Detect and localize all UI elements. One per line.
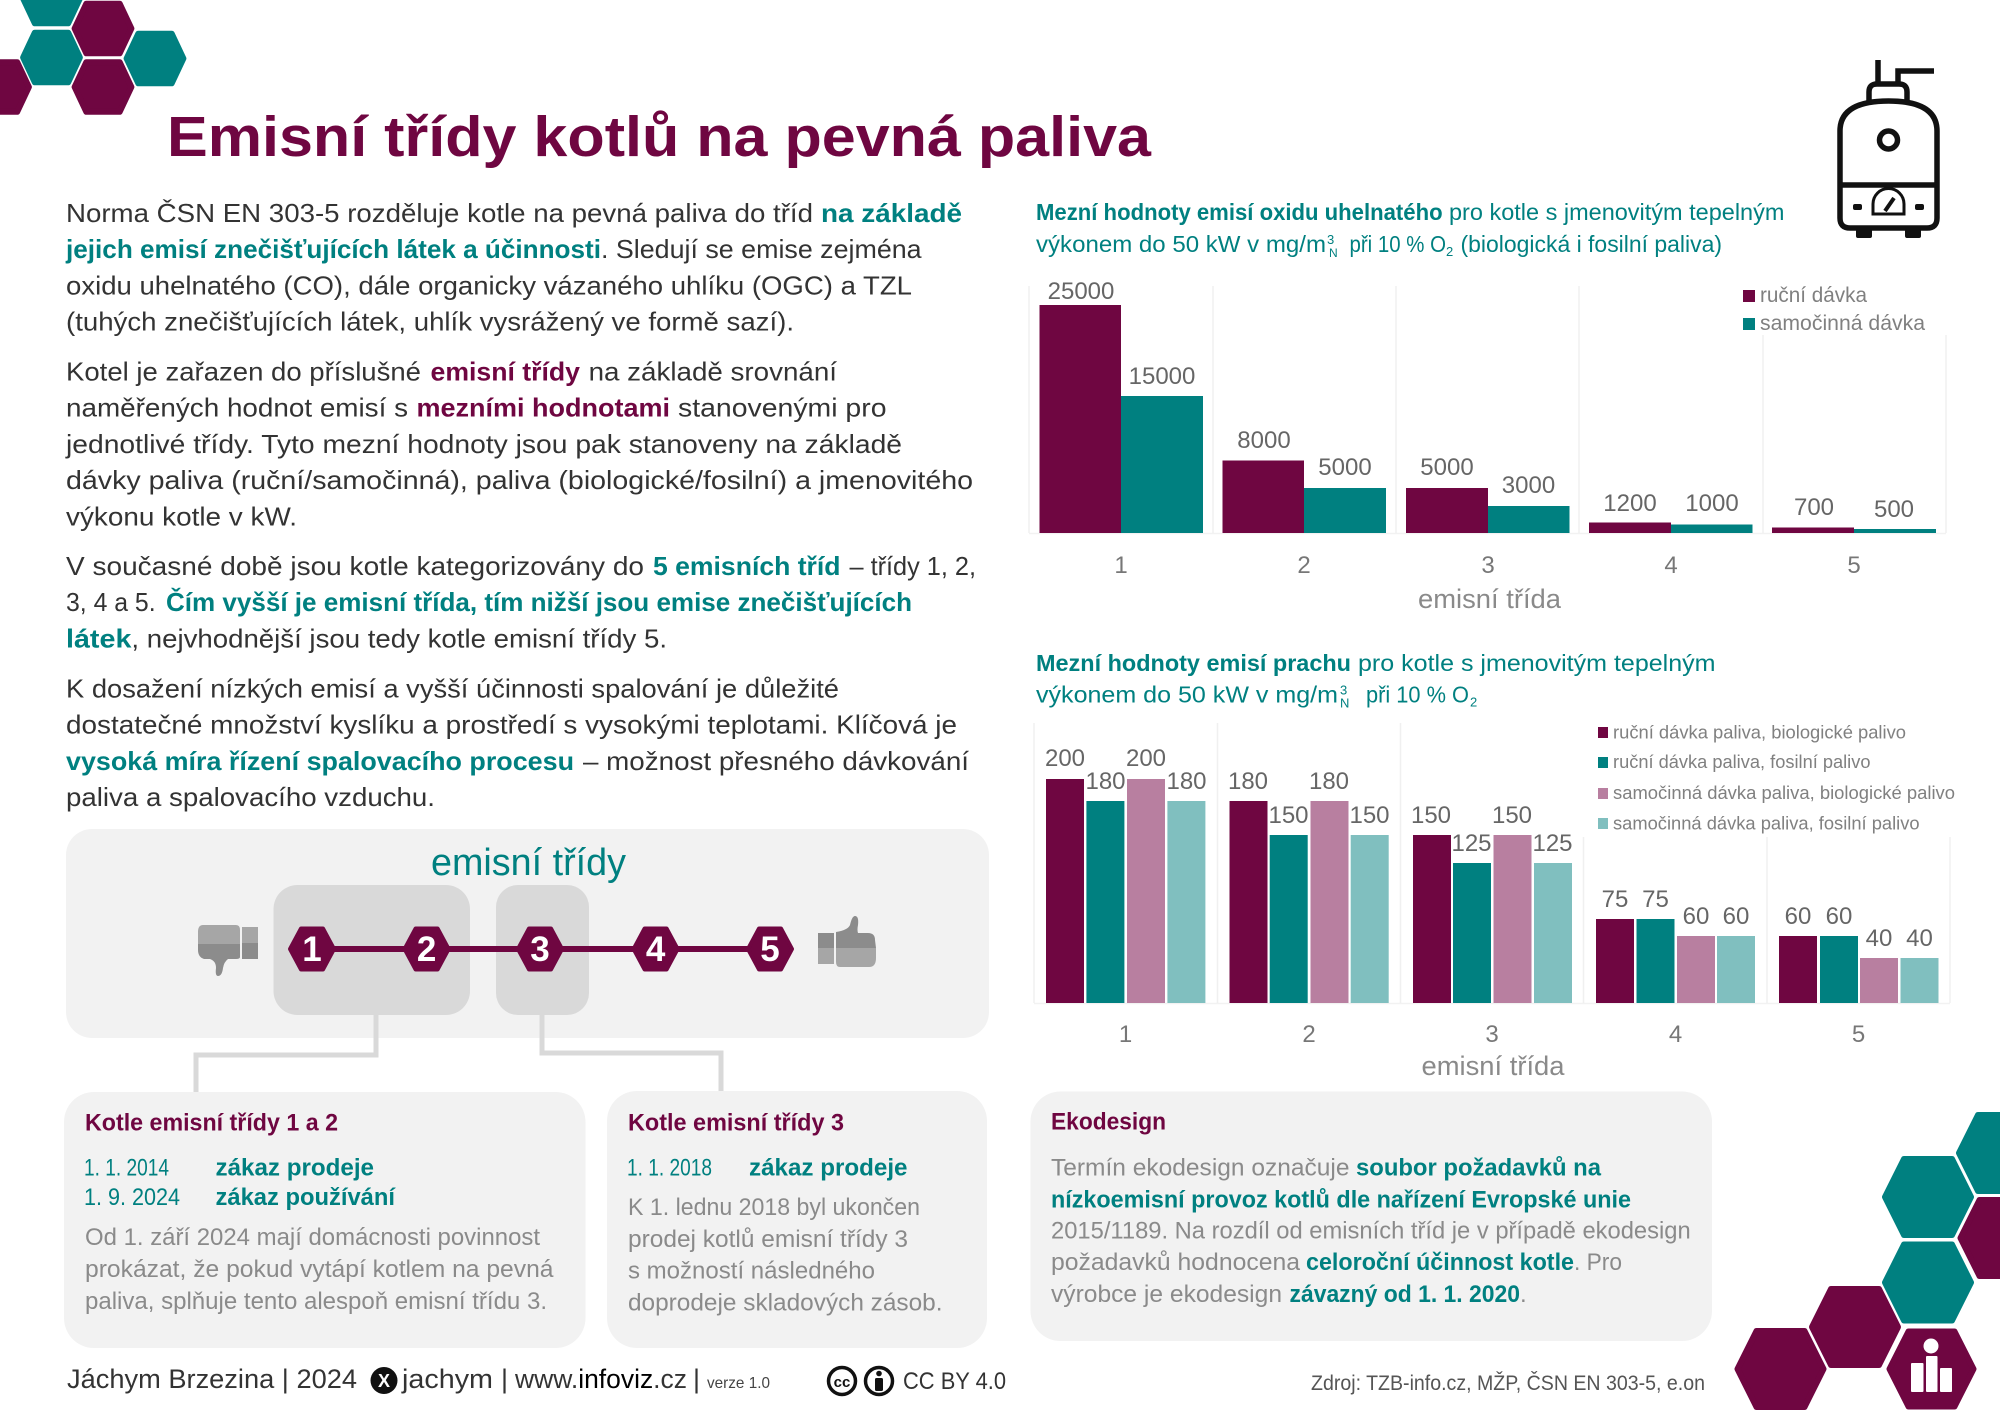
text block: intro paragraph 2 xyxy=(65,356,973,531)
text block: intro paragraph 4: – možnost přesného dávkování xyxy=(583,746,970,776)
card text: prokázat, že pokud vytápí kotlem na pevná xyxy=(85,1256,554,1283)
legend: ruční dávka paliva, fosilní palivo xyxy=(1613,752,1870,772)
ban date xyxy=(627,1154,908,1182)
text block: intro paragraph 3: 5 emisních tříd xyxy=(653,551,840,581)
heading: emisní třídy: emisní třídy xyxy=(431,842,626,884)
text block: intro paragraph 3 xyxy=(66,551,976,653)
text block: intro paragraph 3: látek xyxy=(66,623,132,653)
text block: intro paragraph 4: K dosažení nízkých emisí a vyšší účinnosti spalování je důležité xyxy=(66,674,839,704)
class 3 bars: 3000 xyxy=(1502,472,1555,499)
card text: paliva, splňuje tento alespoň emisní třídu 3. xyxy=(85,1288,547,1315)
text block: intro paragraph 4: dostatečné množství kyslíku a prostředí s vysokými teplotami. Klíčová je xyxy=(66,710,957,740)
ban dates: zákaz používání xyxy=(216,1184,396,1211)
footer: sources: Zdroj: TZB-info.cz, MŽP, ČSN EN 303-5, e.on xyxy=(1311,1372,1705,1395)
ban dates: 1. 9. 2024 xyxy=(84,1184,180,1211)
heading: dust chart: při 10 % O xyxy=(1366,682,1469,708)
text block: intro paragraph 3: , nejvhodnější jsou tedy kotle emisní třídy 5. xyxy=(131,623,667,653)
class 5 hexagon: 5 xyxy=(760,930,780,969)
icon: X logo: X xyxy=(378,1371,390,1391)
class 5 bars: 40 xyxy=(1866,925,1892,952)
heading: carbon monoxide chart: 3 xyxy=(1327,232,1334,247)
class 5 bars: 40 xyxy=(1906,925,1933,952)
text block: intro paragraph 1: . Sledují se emise zejména xyxy=(601,234,922,264)
class 5 bars: 500 xyxy=(1874,496,1914,523)
class 5 bars xyxy=(1772,494,1936,533)
text block: intro paragraph 2: Kotel je zařazen do příslušné xyxy=(66,356,421,386)
class 2 bars: 150 xyxy=(1268,802,1309,829)
class 3 bars: 125 xyxy=(1532,830,1573,857)
class 2 bars: 180 xyxy=(1228,768,1268,795)
panel: emission classes scale xyxy=(66,829,989,1038)
x axis labels: 4 xyxy=(1664,552,1678,579)
x axis title: emisní třída xyxy=(1418,584,1562,614)
panel text: soubor požadavků na xyxy=(1356,1154,1602,1182)
class 2 bars: 8000 xyxy=(1237,427,1291,454)
x axis labels: 5 xyxy=(1847,552,1861,579)
panel text: výrobce je ekodesign xyxy=(1051,1281,1282,1308)
class 5 bars xyxy=(1779,903,1938,1003)
heading: dust chart: Mezní hodnoty emisí prachu xyxy=(1036,650,1351,676)
class 4 bars: 60 xyxy=(1683,903,1709,930)
text block: intro paragraph 4 xyxy=(66,674,970,812)
heading: dust chart xyxy=(1036,650,1716,710)
text block: intro paragraph 3: Čím vyšší je emisní třída, tím nižší jsou emise znečišťujících xyxy=(166,587,912,617)
text block: intro paragraph 2: na základě srovnání xyxy=(589,356,838,386)
class 5 bars: 700 xyxy=(1794,494,1834,521)
icon: thumb down xyxy=(198,925,258,976)
x axis labels: 4 xyxy=(1669,1021,1682,1048)
x axis labels: 3 xyxy=(1481,552,1495,579)
class 1 bars: 15000 xyxy=(1129,363,1195,390)
text block: intro paragraph 2: jednotlivé třídy. Tyto mezní hodnoty jsou pak stanoveny na základě xyxy=(65,429,902,459)
panel text xyxy=(1051,1154,1691,1308)
heading: carbon monoxide chart: výkonem do 50 kW v mg/m xyxy=(1036,231,1326,257)
class 4 bars: 75 xyxy=(1642,886,1669,913)
text block: intro paragraph 1: (tuhých znečišťujících látek, uhlík vysrážený ve formě sazí). xyxy=(66,307,794,337)
legend xyxy=(1598,722,1955,834)
class 5 bars: 60 xyxy=(1785,903,1811,930)
text block: intro paragraph 1: jejich emisí znečišťujících látek a účinnosti xyxy=(65,234,601,264)
panel: boilers of classes 1 and 2 xyxy=(64,1092,586,1348)
class 3 hexagon xyxy=(518,928,562,970)
ban dates: 1. 1. 2014 xyxy=(84,1154,169,1182)
class 2 bars: 5000 xyxy=(1318,454,1372,481)
panel text: závazný od 1. 1. 2020 xyxy=(1290,1281,1520,1308)
icon: boiler xyxy=(1840,60,1937,238)
panel text: celoroční účinnost kotle xyxy=(1306,1249,1574,1276)
heading: carbon monoxide chart: při 10 % O xyxy=(1350,231,1446,257)
class 4 hexagon xyxy=(634,928,678,970)
class 5 bars: 60 xyxy=(1826,903,1852,930)
text block: intro paragraph 3: V současné době jsou kotle kategorizovány do xyxy=(66,551,644,581)
class 4 bars xyxy=(1596,886,1755,1003)
ban dates xyxy=(84,1154,396,1211)
text block: intro paragraph 4: vysoká míra řízení spalovacího procesu xyxy=(66,746,574,776)
class 4 bars: 1200 xyxy=(1603,490,1657,517)
panel text: 2015/1189. Na rozdíl od emisních tříd je v případě ekodesign xyxy=(1051,1218,1691,1244)
class 4 bars: 60 xyxy=(1723,903,1749,930)
heading: dust chart: pro kotle s jmenovitým tepelným xyxy=(1358,650,1716,676)
class 1 hexagon: 1 xyxy=(302,930,322,969)
icon: Creative Commons: cc xyxy=(834,1374,850,1391)
connector: class 3 to card xyxy=(542,1015,721,1092)
class 4 bars: 75 xyxy=(1602,886,1628,913)
heading: carbon monoxide chart: Mezní hodnoty emisí oxidu uhelnatého xyxy=(1036,199,1443,225)
class 2 bars: 180 xyxy=(1309,768,1349,795)
legend: samočinná dávka xyxy=(1760,312,1925,335)
heading: carbon monoxide chart: 2 xyxy=(1446,244,1453,259)
icon: Creative Commons xyxy=(828,1368,892,1394)
ban date: zákaz prodeje xyxy=(749,1154,908,1182)
x axis labels: 1 xyxy=(1114,552,1128,579)
panel text: Termín ekodesign označuje xyxy=(1051,1154,1350,1182)
class 4 bars: 1000 xyxy=(1685,490,1739,517)
x axis title: emisní třída xyxy=(1422,1051,1565,1081)
card text: K 1. lednu 2018 byl ukončen xyxy=(628,1194,920,1221)
text block: intro paragraph 2: mezními hodnotami xyxy=(416,393,670,423)
text block: intro paragraph 2: výkonu kotle v kW. xyxy=(66,501,297,531)
decoration: bottom-right hexagon cluster xyxy=(1738,1115,2000,1407)
x axis labels: 3 xyxy=(1485,1021,1499,1048)
text block: intro paragraph 3: 3, 4 a 5. xyxy=(66,587,156,617)
panel heading: Ekodesign xyxy=(1051,1108,1166,1136)
x axis labels: 2 xyxy=(1302,1021,1316,1048)
class 2 bars xyxy=(1228,768,1390,1003)
x axis labels xyxy=(1114,552,1861,579)
decoration: top-left hexagon cluster xyxy=(0,0,183,112)
heading: carbon monoxide chart: pro kotle s jmenovitým tepelným xyxy=(1449,199,1784,225)
text block: intro paragraph 2: stanovenými pro xyxy=(678,393,886,423)
card text: doprodeje skladových zásob. xyxy=(628,1290,942,1316)
heading: dust chart: 2 xyxy=(1470,694,1477,710)
text block: intro paragraph 1: na základě xyxy=(821,198,962,228)
icon: thumb up xyxy=(818,916,876,967)
class 1 bars: 200 xyxy=(1126,745,1166,772)
ban dates: zákaz prodeje xyxy=(216,1154,374,1182)
bar chart: dust limits xyxy=(1034,722,1955,1081)
text block: intro paragraph 1 xyxy=(65,198,962,337)
legend: ruční dávka paliva, biologické palivo xyxy=(1613,722,1906,742)
highlight box: class 3 xyxy=(496,885,589,1015)
legend xyxy=(1743,284,1925,335)
text block: intro paragraph 2: dávky paliva (ruční/samočinná), paliva (biologické/fosilní) a jmenovitého xyxy=(66,465,973,495)
panel text: . xyxy=(1520,1281,1527,1308)
footer: handle and website xyxy=(401,1364,770,1394)
heading: dust chart: výkonem do 50 kW v mg/m xyxy=(1036,682,1338,708)
x axis labels: 2 xyxy=(1297,552,1311,579)
heading: dust chart: N xyxy=(1340,696,1349,710)
highlight box: classes 1 and 2 xyxy=(274,885,470,1015)
legend: samočinná dávka paliva, fosilní palivo xyxy=(1613,814,1920,834)
card text: Od 1. září 2024 mají domácnosti povinnost xyxy=(85,1224,540,1251)
x axis labels xyxy=(1119,1021,1865,1048)
class 3 bars xyxy=(1411,802,1573,1003)
class 1 bars: 25000 xyxy=(1048,278,1114,305)
text block: intro paragraph 2: emisní třídy xyxy=(430,356,581,386)
heading: carbon monoxide chart xyxy=(1036,199,1784,260)
text block: intro paragraph 4: paliva a spalovacího vzduchu. xyxy=(66,782,435,812)
class 5 hexagon xyxy=(748,928,792,970)
connector: classes 1 and 2 to card xyxy=(196,1015,376,1092)
text block: intro paragraph 1: oxidu uhelnatého (CO), dále organicky vázaného uhlíku (OGC) a TZL xyxy=(66,270,912,300)
legend: samočinná dávka paliva, biologické palivo xyxy=(1613,783,1955,803)
footer: handle and website: verze 1.0 xyxy=(707,1375,770,1392)
class 3 bars: 5000 xyxy=(1420,454,1474,481)
text block: intro paragraph 3: – třídy 1, 2, xyxy=(850,551,976,581)
bar chart: carbon monoxide limits xyxy=(1029,278,1946,614)
card text xyxy=(85,1224,554,1315)
x axis labels: 5 xyxy=(1852,1021,1865,1048)
card heading: Kotle emisní třídy 3 xyxy=(628,1110,844,1136)
class 1 bars: 180 xyxy=(1085,768,1126,795)
text block: intro paragraph 1: Norma ČSN EN 303-5 rozděluje kotle na pevná paliva do tříd xyxy=(66,198,813,228)
legend: ruční dávka xyxy=(1760,284,1867,307)
panel: ecodesign xyxy=(1030,1092,1712,1341)
text block: intro paragraph 2: naměřených hodnot emisí s xyxy=(66,393,408,423)
card text: s možností následného xyxy=(628,1258,875,1284)
panel: boilers of class 3 xyxy=(607,1091,987,1348)
class 3 bars: 150 xyxy=(1492,802,1532,829)
footer: handle and website: | xyxy=(501,1364,508,1394)
heading: carbon monoxide chart: N xyxy=(1329,246,1338,260)
class 2 hexagon xyxy=(405,928,449,970)
heading: carbon monoxide chart: (biologická i fosilní paliva) xyxy=(1460,231,1722,257)
class 2 bars xyxy=(1222,427,1386,533)
card text: prodej kotlů emisní třídy 3 xyxy=(628,1226,908,1253)
class 2 bars: 150 xyxy=(1349,802,1390,829)
class 3 bars: 150 xyxy=(1411,802,1451,829)
icon: X logo xyxy=(370,1367,398,1394)
class 1 bars xyxy=(1040,278,1203,533)
class 4 bars xyxy=(1589,490,1752,533)
class 1 bars: 200 xyxy=(1045,745,1085,772)
class 1 hexagon xyxy=(290,928,334,970)
panel text: požadavků hodnocena xyxy=(1051,1249,1301,1276)
footer: handle and website: | xyxy=(693,1364,700,1394)
class 4 hexagon: 4 xyxy=(646,930,666,969)
panel text: . Pro xyxy=(1574,1249,1622,1276)
icon: person and bars logo xyxy=(1911,1338,1952,1392)
class 3 hexagon: 3 xyxy=(530,930,550,969)
class 3 bars: 125 xyxy=(1451,830,1492,857)
x axis labels: 1 xyxy=(1119,1021,1132,1048)
class 2 hexagon: 2 xyxy=(417,930,436,969)
card text xyxy=(628,1194,942,1316)
footer: handle and website: www.infoviz.cz xyxy=(514,1364,687,1394)
heading: dust chart: 3 xyxy=(1340,682,1347,698)
class 3 bars xyxy=(1406,454,1570,533)
ban date: 1. 1. 2018 xyxy=(627,1154,712,1182)
title: Emisní třídy kotlů na pevná paliva xyxy=(167,105,1152,169)
footer: author: Jáchym Brzezina | 2024 xyxy=(67,1364,357,1394)
panel text: nízkoemisní provoz kotlů dle nařízení Evropské unie xyxy=(1051,1186,1631,1214)
class 1 bars: 180 xyxy=(1166,768,1207,795)
connector line xyxy=(312,946,770,952)
footer: licence: CC BY 4.0 xyxy=(903,1368,1006,1395)
footer: handle and website: jachym xyxy=(401,1364,493,1394)
card heading: Kotle emisní třídy 1 a 2 xyxy=(85,1110,338,1136)
class 1 bars xyxy=(1045,745,1207,1003)
